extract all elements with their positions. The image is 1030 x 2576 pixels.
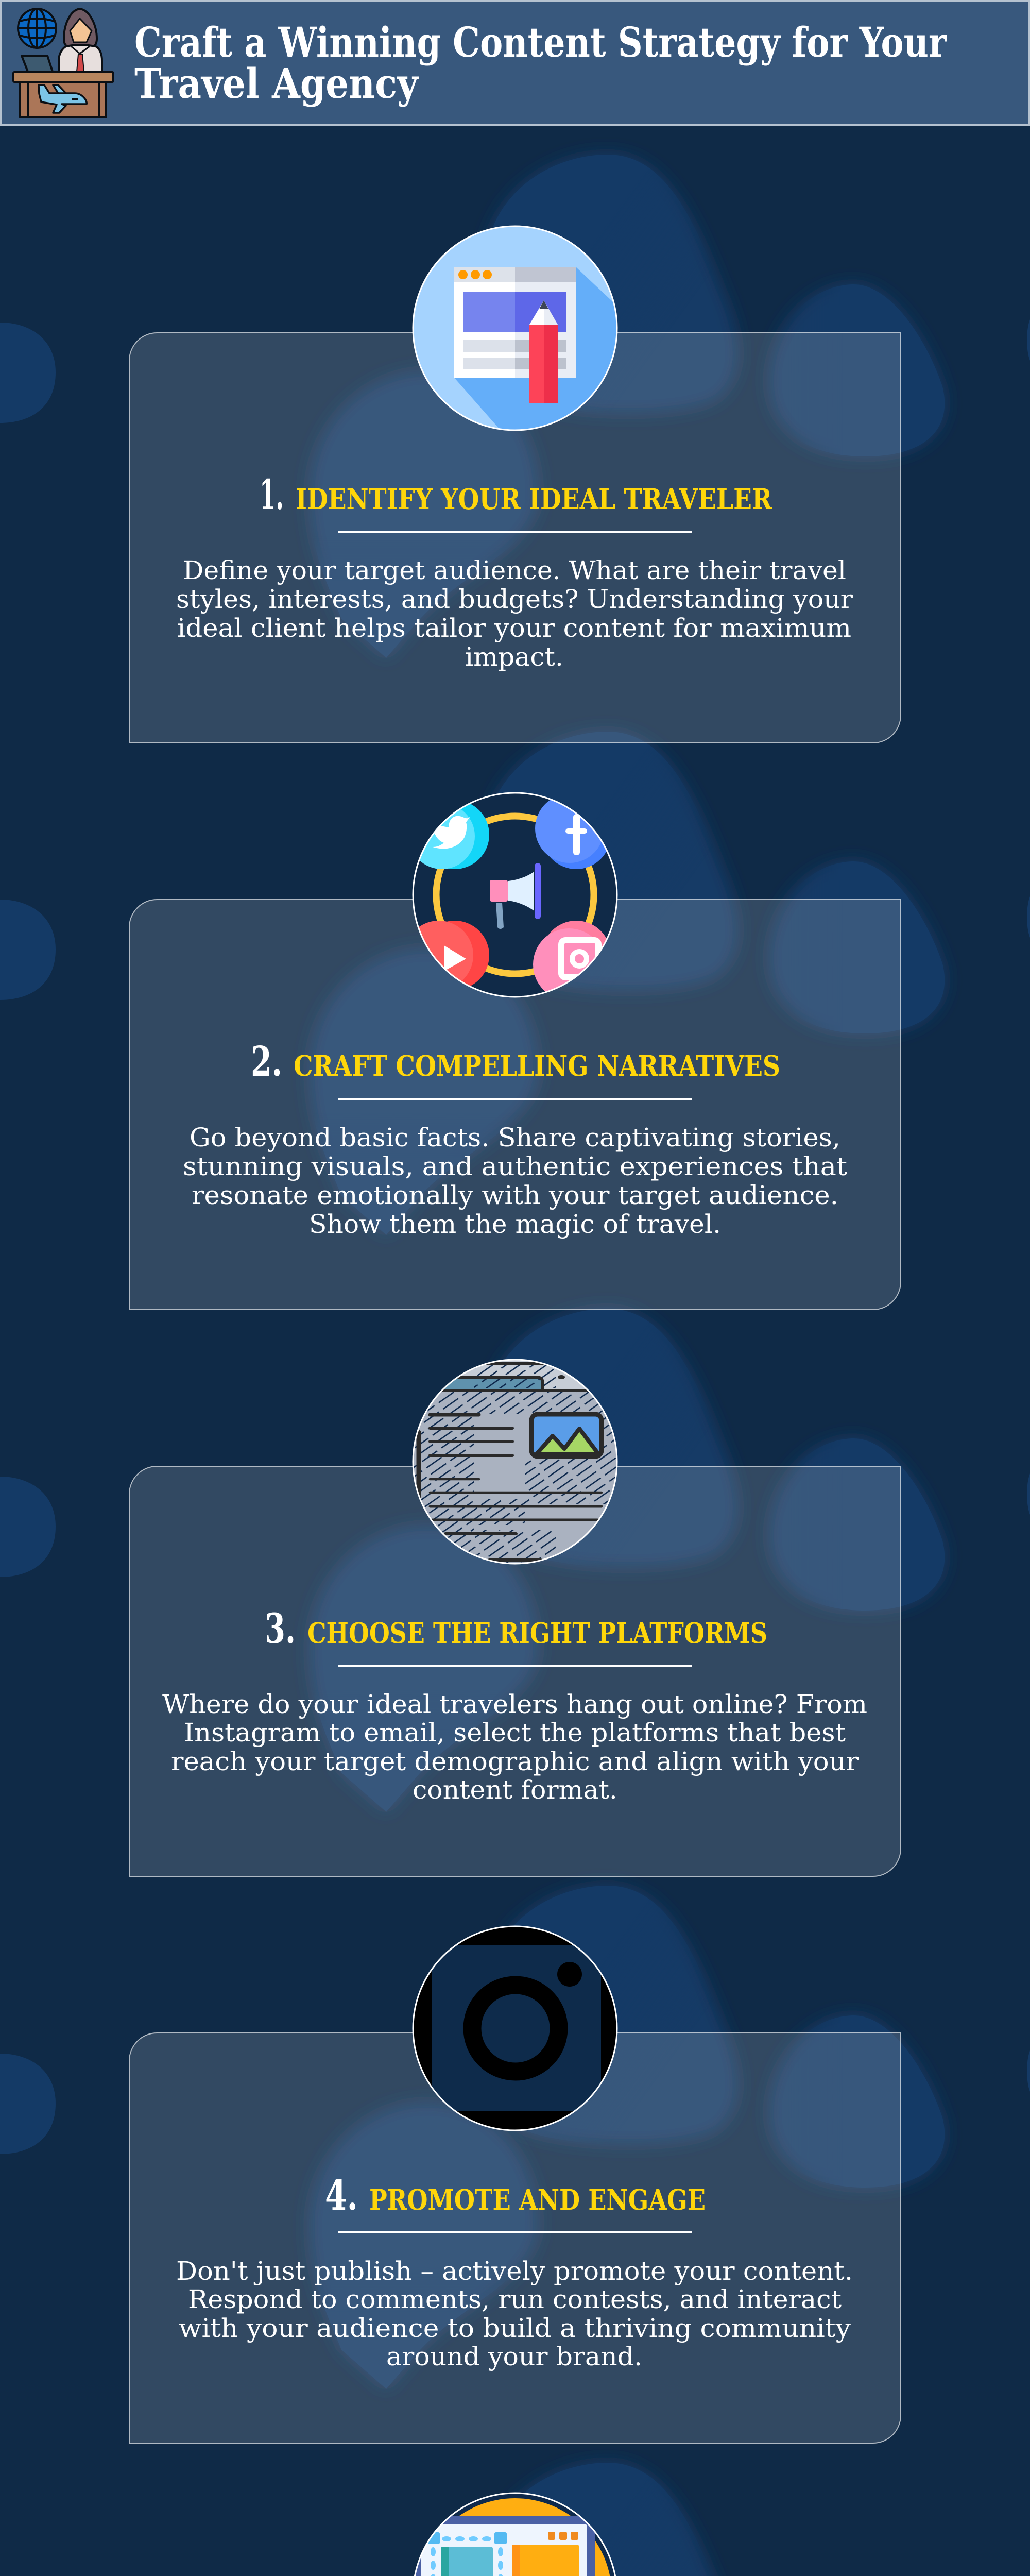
step body text (183, 1123, 847, 1239)
step body text: Instagram to email, select the platforms that best (184, 1718, 846, 1748)
panel: step 4 promote and engage (129, 2032, 901, 2444)
step body text: Don't just publish – actively promote your content. (176, 2256, 853, 2286)
step heading: 4. (325, 2171, 358, 2219)
step heading: 3. (265, 1604, 296, 1653)
icon: monitor with layout editor (414, 2493, 616, 2576)
step body text: Define your target audience. What are their travel (183, 555, 846, 585)
step heading (325, 2171, 706, 2219)
step body text: content format. (413, 1775, 617, 1805)
icon: web page and pencil (412, 226, 618, 431)
panel: step 3 choose the right platforms (129, 1466, 901, 1877)
icon: sketched web page with image (412, 1359, 618, 1564)
step heading (260, 470, 772, 519)
step body text: Show them the magic of travel. (309, 1209, 721, 1239)
icon: travel agent at desk (13, 9, 113, 117)
step body text: ideal client helps tailor your content for maximum (177, 613, 851, 643)
step body text: stunning visuals, and authentic experiences that (183, 1151, 847, 1181)
step body text: Go beyond basic facts. Share captivating stories, (190, 1123, 840, 1153)
step body text (162, 1689, 867, 1805)
step heading: 1. (260, 470, 284, 519)
step body text: styles, interests, and budgets? Understanding your (176, 584, 853, 614)
step body text: Where do your ideal travelers hang out online? From (162, 1689, 867, 1719)
step body text: Respond to comments, run contests, and interact (188, 2284, 842, 2314)
step heading: CRAFT COMPELLING NARRATIVES (294, 1049, 780, 1082)
step body text: around your brand. (386, 2342, 642, 2371)
title (134, 18, 947, 108)
icon: megaphone with social media (412, 792, 618, 997)
panel: step 2 craft compelling narratives (129, 899, 901, 1310)
step heading: CHOOSE THE RIGHT PLATFORMS (307, 1616, 767, 1650)
header banner (0, 0, 1030, 126)
icon: instagram camera (412, 1926, 618, 2131)
step body text: resonate emotionally with your target audience. (192, 1180, 838, 1210)
step heading: 2. (251, 1037, 282, 1086)
step body text: with your audience to build a thriving community (179, 2313, 851, 2343)
step body text: reach your target demographic and align with your (171, 1747, 859, 1776)
panel: step 1 identify your ideal traveler (129, 332, 901, 743)
step heading (265, 1604, 767, 1653)
step heading: IDENTIFY YOUR IDEAL TRAVELER (296, 482, 772, 516)
title: Travel Agency (134, 59, 419, 108)
step heading: PROMOTE AND ENGAGE (369, 2183, 706, 2216)
step body text (176, 555, 853, 672)
step body text: impact. (465, 642, 563, 672)
step body text (176, 2256, 853, 2371)
step heading (251, 1037, 780, 1086)
